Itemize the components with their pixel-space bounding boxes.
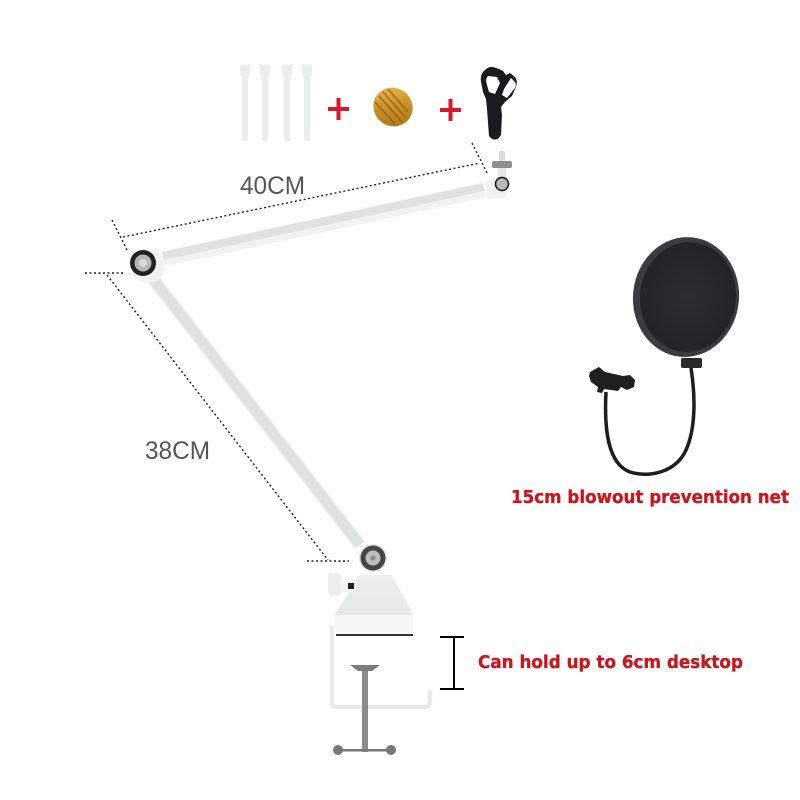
base joint [359, 544, 387, 572]
screen [627, 232, 745, 362]
desk clamp [328, 573, 430, 755]
label: 38CM: 38CM [145, 437, 210, 465]
dotted dimension 38CM [85, 273, 349, 561]
C frame [332, 626, 430, 707]
screw [333, 665, 396, 755]
icon: microphone clip [481, 67, 517, 140]
gooseneck [606, 368, 694, 474]
body underside [336, 634, 413, 636]
gooseneck clip [589, 367, 635, 393]
elbow joint [130, 250, 156, 276]
upper arm [163, 187, 484, 259]
icon: cable straps [240, 64, 312, 142]
dotted dimension 40CM [112, 143, 488, 252]
tension knob [328, 573, 354, 596]
elbow housing [131, 249, 165, 283]
icon: second plus [440, 99, 461, 121]
lower arm [150, 275, 360, 545]
pop filter [589, 232, 745, 474]
clamp body [335, 575, 413, 633]
boom arm [130, 151, 512, 572]
bracket: desktop height [440, 637, 464, 689]
tab [681, 358, 702, 368]
top swivel [485, 151, 512, 199]
icon: brass adapter [366, 80, 420, 134]
label: 40CM: 40CM [240, 172, 305, 200]
label: desk capacity: Can hold up to 6cm desktop [478, 652, 743, 673]
icon: first plus [328, 98, 349, 120]
